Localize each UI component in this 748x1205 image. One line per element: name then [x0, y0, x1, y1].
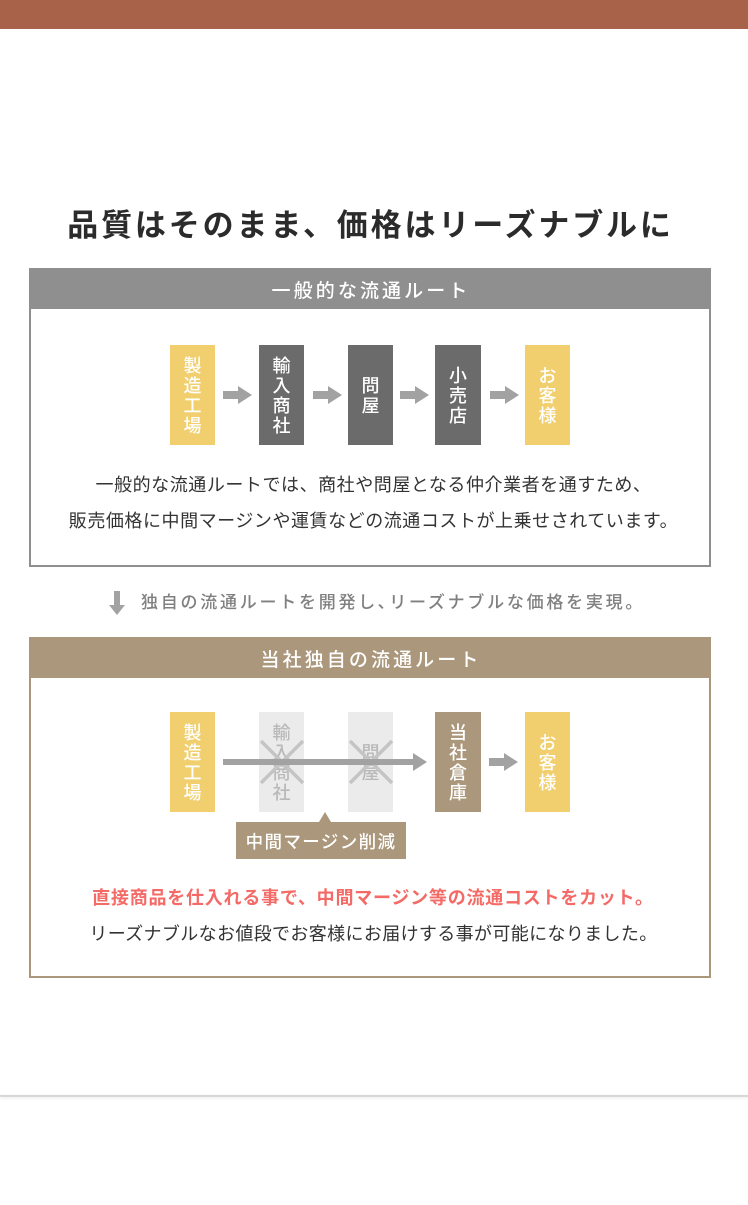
callout: margin reduction — [236, 812, 406, 859]
arrow — [400, 386, 429, 404]
cross marks — [260, 740, 394, 784]
arrow — [489, 753, 518, 771]
panel frame — [29, 268, 711, 567]
box: factory — [170, 712, 215, 812]
box: importer removed: 社 — [272, 783, 290, 803]
callout label — [236, 822, 406, 859]
transition note — [109, 591, 645, 615]
box: own warehouse: 社 — [449, 743, 467, 763]
box: importer: 入 — [272, 376, 290, 396]
arrow — [490, 386, 519, 404]
box: retailer: 小 — [449, 366, 467, 386]
box: customer: 様 — [538, 406, 556, 426]
bottom divider — [0, 1095, 748, 1097]
box: importer — [259, 345, 304, 445]
box: factory: 造 — [184, 743, 202, 763]
description text: リーズナブルなお値段でお客様にお届けする事が可能になりました。 — [89, 924, 658, 944]
box: own warehouse: 当 — [449, 723, 467, 743]
box: wholesaler — [348, 345, 393, 445]
panel heading: 一般的な流通ルート — [272, 281, 470, 302]
box: retailer — [435, 345, 481, 445]
box: wholesaler: 屋 — [362, 396, 380, 416]
callout label: 中間マージン削減 — [246, 832, 396, 852]
box: customer: 客 — [538, 386, 556, 406]
box: factory: 製 — [184, 723, 202, 743]
top colour band — [0, 0, 748, 29]
box: importer: 輸 — [272, 356, 290, 376]
box: importer removed: 輸 — [272, 723, 290, 743]
box: retailer: 売 — [449, 386, 467, 406]
box: customer — [525, 712, 570, 812]
box: own warehouse: 倉 — [449, 763, 467, 783]
description text: 販売価格に中間マージンや運賃などの流通コストが上乗せされています。 — [69, 511, 678, 531]
panel heading: 当社独自の流通ルート — [260, 650, 482, 671]
panel heading — [29, 268, 711, 309]
arrow — [223, 386, 252, 404]
box: factory: 場 — [184, 783, 202, 803]
panel: own route — [29, 637, 711, 978]
box: factory: 製 — [184, 356, 202, 376]
description text: 一般的な流通ルートでは、商社や問屋となる仲介業者を通すため、 — [96, 475, 651, 495]
flow: general route — [170, 345, 570, 445]
box: importer: 商 — [272, 396, 290, 416]
box: customer: 客 — [538, 753, 556, 773]
box: customer: お — [538, 733, 556, 753]
highlight text: 直接商品を仕入れる事で、中間マージン等の流通コストをカット。 — [92, 888, 654, 908]
description text — [69, 475, 678, 531]
flow: own route — [170, 712, 570, 859]
box: importer: 社 — [272, 416, 290, 436]
panel heading — [29, 637, 711, 678]
box: factory: 場 — [184, 416, 202, 436]
box: factory: 工 — [184, 763, 202, 783]
box: customer: お — [538, 366, 556, 386]
box: own warehouse: 庫 — [449, 783, 467, 803]
box: importer removed: 入 — [272, 743, 290, 763]
box: wholesaler: 問 — [362, 376, 380, 396]
panel frame — [29, 637, 711, 978]
box: factory — [170, 345, 215, 445]
note text: 独自の流通ルートを開発し､リーズナブルな価格を実現。 — [141, 593, 645, 612]
box: wholesaler removed: 問 — [362, 743, 380, 763]
title: 品質はそのまま、価格はリーズナブルに — [67, 208, 674, 243]
box: own warehouse — [435, 712, 481, 812]
box: customer — [525, 345, 570, 445]
callout pointer — [319, 812, 331, 822]
icon: down arrow — [109, 591, 125, 615]
box: wholesaler removed — [348, 712, 393, 812]
box: retailer: 店 — [449, 406, 467, 426]
box: wholesaler removed: 屋 — [362, 763, 380, 783]
box: factory: 造 — [184, 376, 202, 396]
box: customer: 様 — [538, 773, 556, 793]
arrow — [313, 386, 342, 404]
panel: general route — [29, 268, 711, 567]
box: factory: 工 — [184, 396, 202, 416]
box: importer removed: 商 — [272, 763, 290, 783]
long arrow — [223, 753, 427, 771]
box: importer removed — [259, 712, 304, 812]
